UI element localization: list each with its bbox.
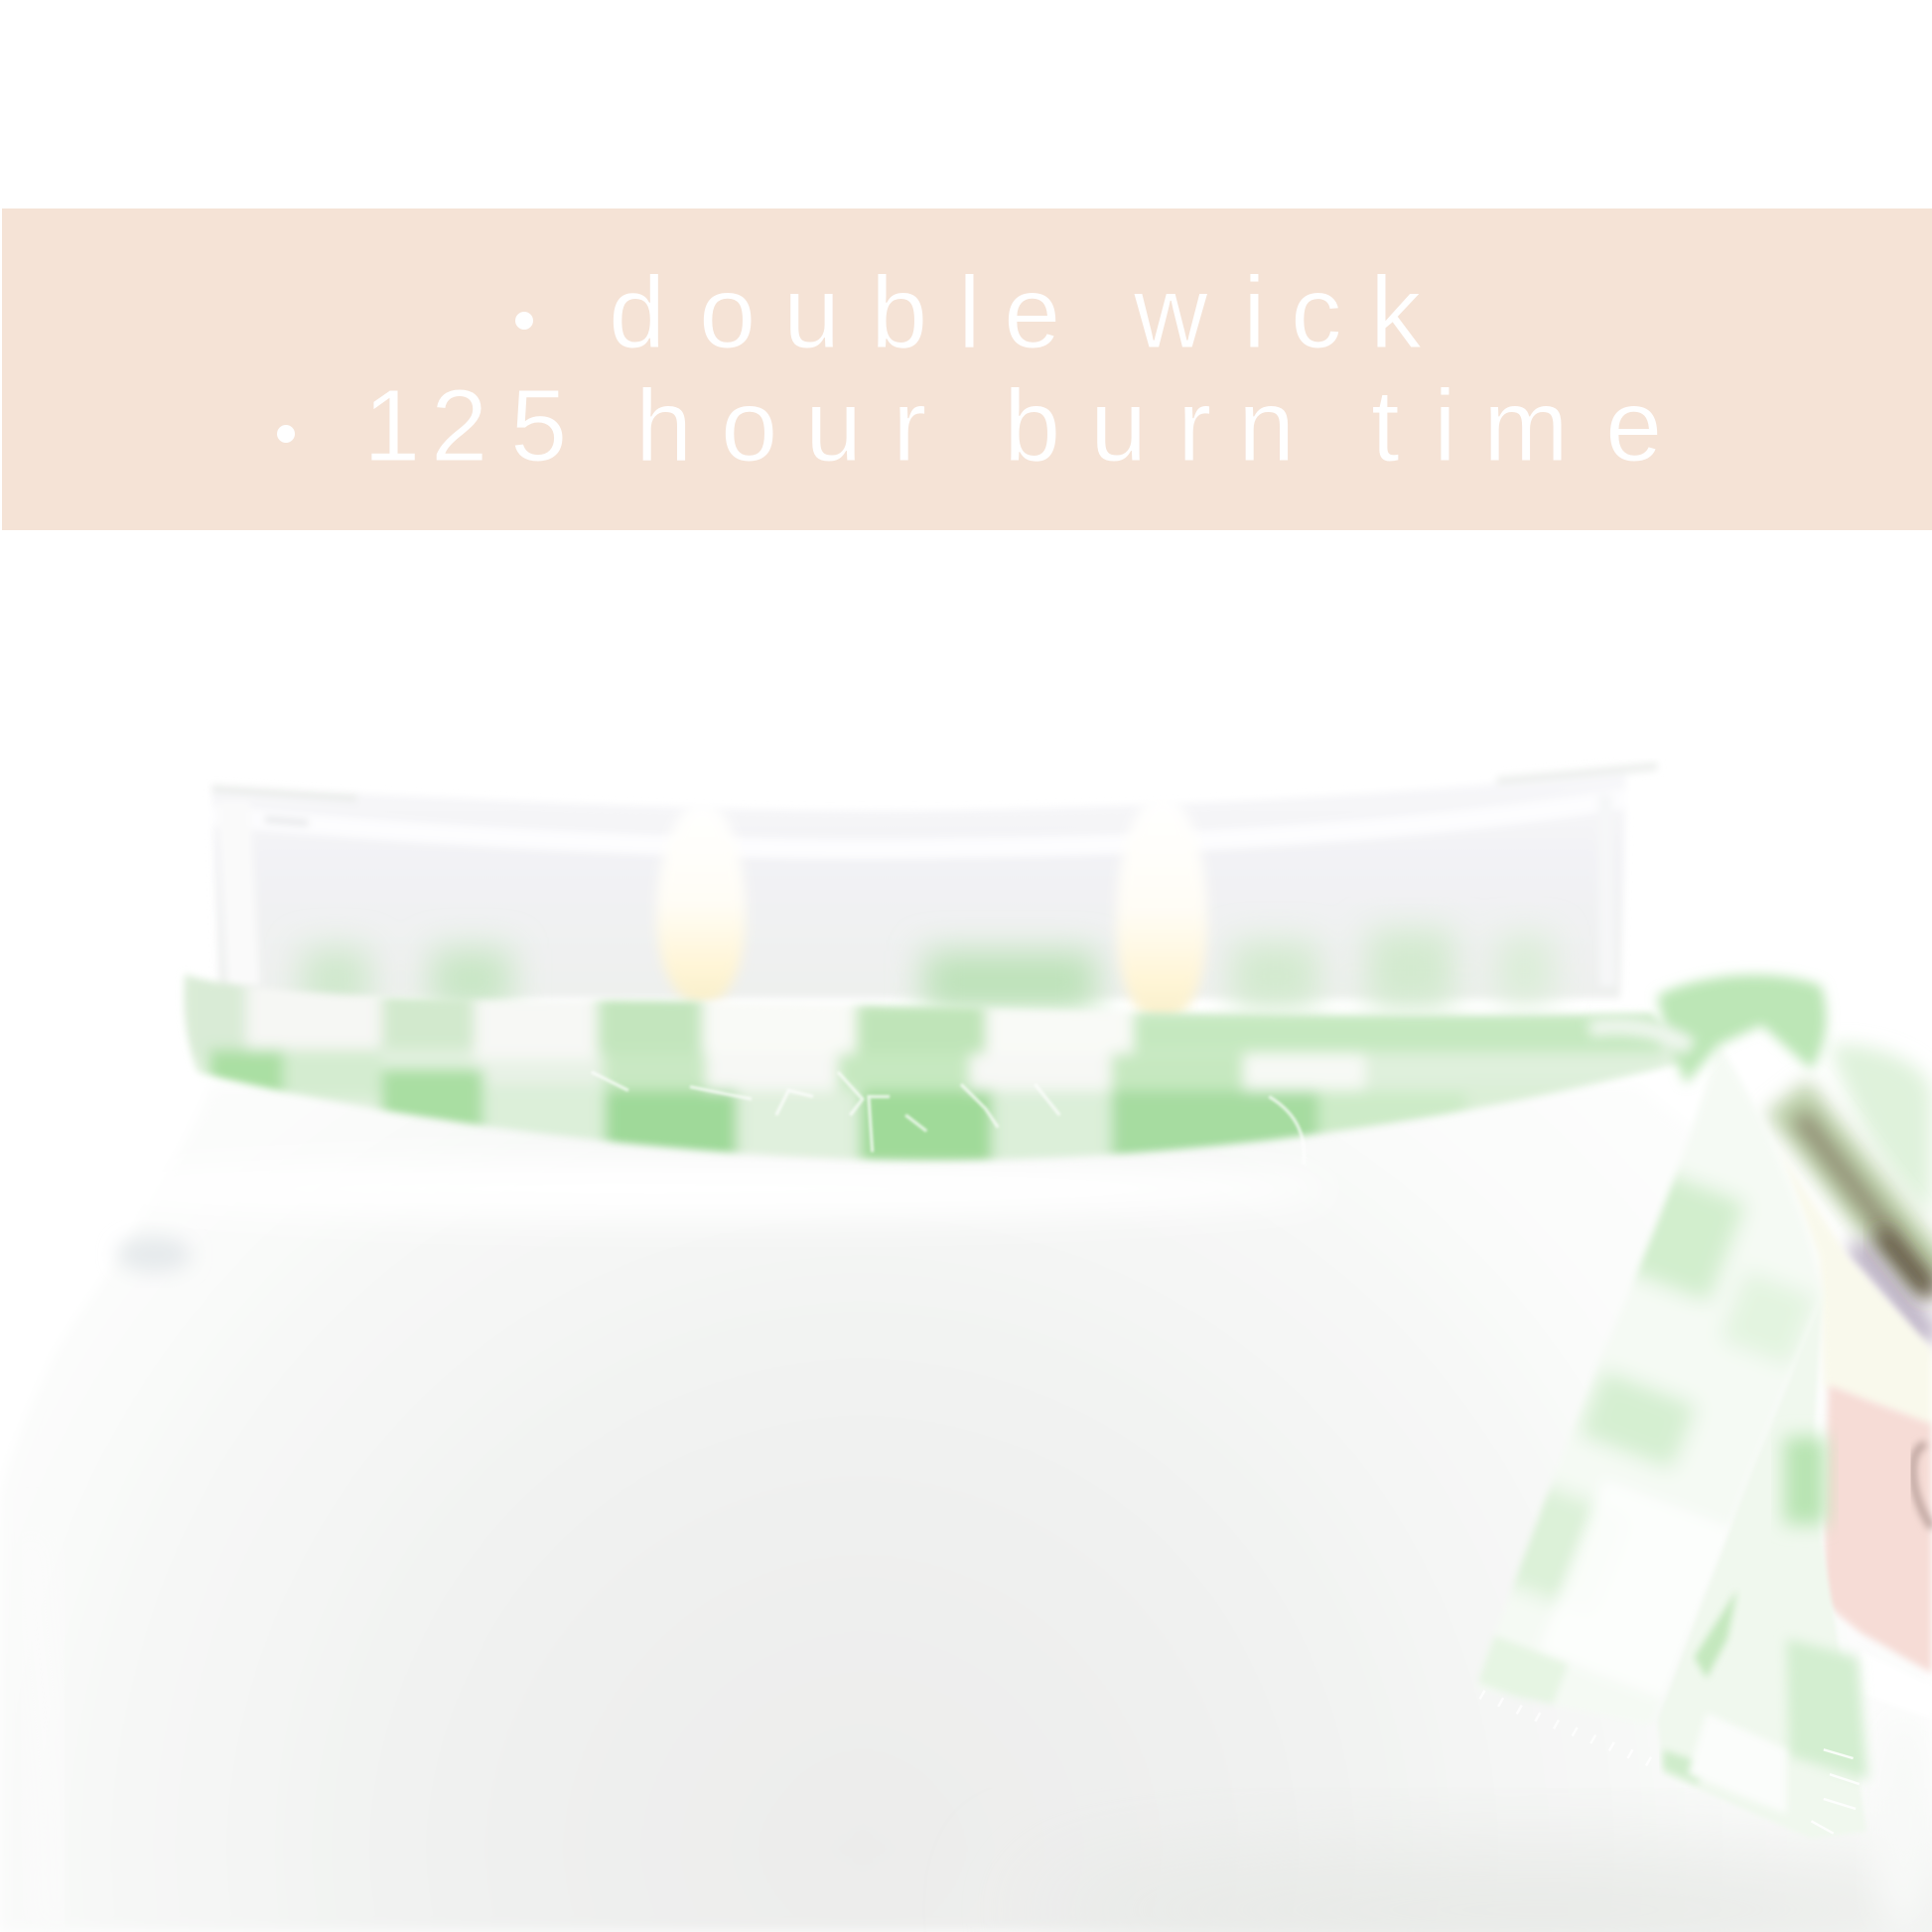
jar body <box>0 1084 1932 1932</box>
ribbon knot <box>1589 975 1826 1084</box>
white cover above jar <box>0 690 1932 781</box>
cream card label <box>1777 1146 1932 1430</box>
banner text: product features <box>277 255 1662 483</box>
pink tag <box>1824 1385 1932 1719</box>
flame left <box>656 801 746 1004</box>
greenery behind the knot <box>1787 1044 1932 1340</box>
text line: double wick: double wick <box>609 255 1422 369</box>
hanging ribbon tail front layer <box>1479 1054 1819 1704</box>
text line: 125 hour burn time: 125 hour burn time <box>363 368 1662 483</box>
frayed threads on ribbon <box>592 1072 1305 1165</box>
photo: candle jar with gingham ribbon <box>110 762 1932 1932</box>
gingham ribbon band <box>181 973 1680 1166</box>
green ribbon reflection in glass <box>302 930 1553 1013</box>
hanging ribbon tail back layer <box>1657 1297 1867 1839</box>
banner: peach band <box>2 208 1932 530</box>
flame right <box>1116 794 1207 1023</box>
glass rim and neck <box>211 766 1657 998</box>
